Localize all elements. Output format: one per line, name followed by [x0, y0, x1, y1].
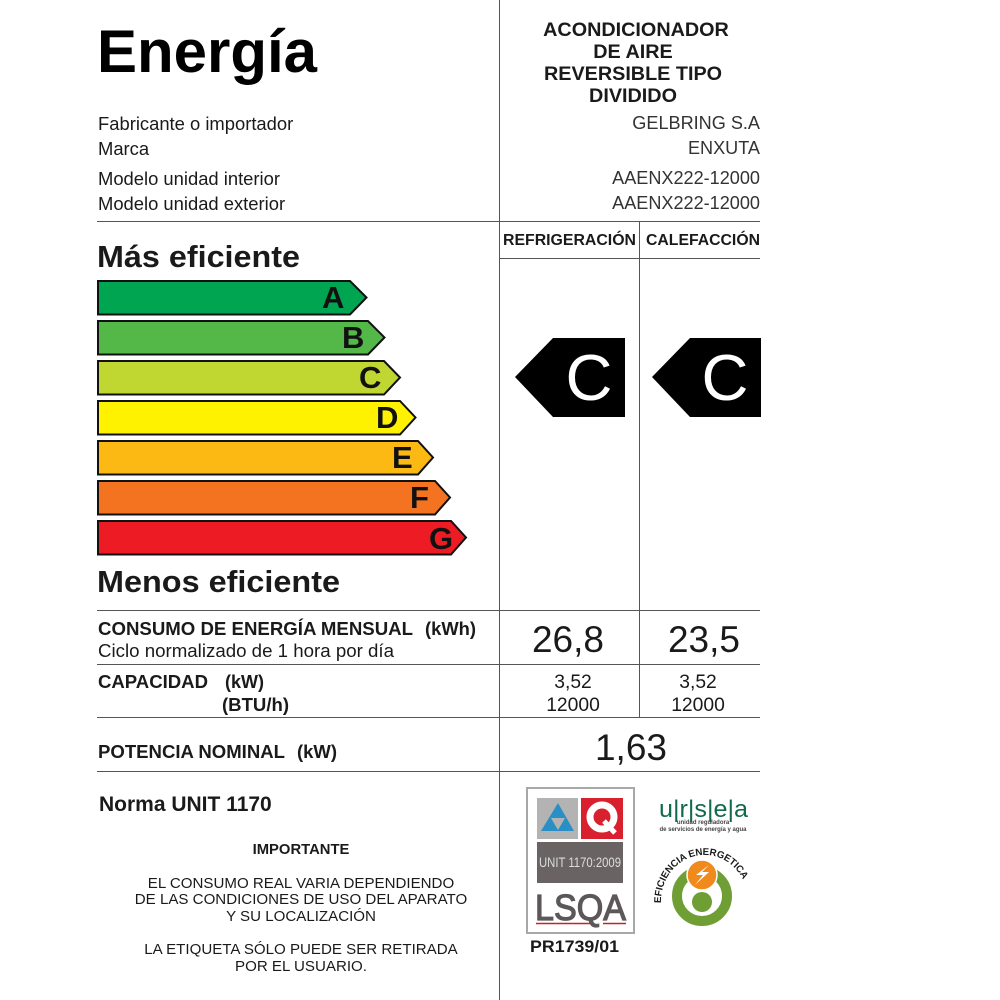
monthly energy consumption row: CONSUMO DE ENERGÍA MENSUAL — [98, 618, 413, 639]
bar C: C — [359, 360, 381, 395]
heating rating arrow — [652, 338, 761, 417]
capacity row: 3,52 — [554, 672, 592, 693]
bar A: A — [322, 280, 344, 315]
manufacturer field labels: Modelo unidad exterior — [98, 193, 285, 214]
bar F: F — [410, 480, 429, 515]
bar E — [98, 440, 433, 475]
monthly energy consumption row: Ciclo normalizado de 1 hora por día — [98, 641, 395, 661]
capacity row: (kW) — [225, 671, 264, 692]
important notice — [135, 842, 467, 975]
nominal power row — [98, 727, 667, 768]
heating rating arrow: C — [702, 341, 748, 414]
manufacturer field labels: Modelo unidad interior — [98, 168, 280, 189]
certificate number: PR1739/01 — [530, 938, 619, 956]
capacity row — [98, 671, 725, 716]
important notice: Y SU LOCALIZACIÓN — [226, 908, 376, 925]
energy efficiency logo: EFICIENCIA ENERGETICA — [654, 848, 748, 902]
cooling rating arrow — [515, 338, 625, 417]
URSEA logo: u|r|s|e|a — [659, 796, 749, 823]
bar G — [98, 521, 466, 556]
important notice: EL CONSUMO REAL VARIA DEPENDIENDO — [148, 875, 454, 892]
bar A — [98, 280, 366, 315]
heading: least efficient: Menos eficiente — [97, 564, 340, 599]
manufacturer field labels — [98, 113, 293, 214]
important notice: IMPORTANTE — [253, 842, 349, 858]
capacity row: 12000 — [671, 695, 725, 716]
bar B: B — [342, 320, 364, 355]
manufacturer field values: AAENX222-12000 — [612, 168, 760, 188]
nominal power row: (kW) — [297, 741, 337, 762]
column header: heating: CALEFACCIÓN — [646, 230, 760, 249]
URSEA logo — [659, 796, 749, 833]
bar E: E — [392, 440, 413, 475]
important notice: DE LAS CONDICIONES DE USO DEL APARATO — [135, 891, 467, 908]
manufacturer field values: GELBRING S.A — [632, 113, 761, 133]
bar B — [98, 320, 384, 355]
URSEA logo: unidad reguladora — [677, 820, 730, 826]
manufacturer field labels: Fabricante o importador — [98, 113, 293, 134]
title: Energía — [97, 18, 318, 85]
important notice: POR EL USUARIO. — [235, 958, 367, 975]
manufacturer field values — [612, 113, 761, 213]
important notice: LA ETIQUETA SÓLO PUEDE SER RETIRADA — [144, 941, 459, 958]
monthly energy consumption row — [98, 618, 740, 661]
bar D: D — [376, 400, 398, 435]
product type heading: DIVIDIDO — [589, 85, 677, 107]
manufacturer field values: ENXUTA — [688, 138, 761, 158]
monthly energy consumption row: (kWh) — [425, 618, 476, 639]
bar D — [98, 400, 416, 435]
standard name: Norma UNIT 1170 — [99, 793, 272, 816]
monthly energy consumption row: 26,8 — [532, 619, 604, 660]
nominal power row: 1,63 — [595, 727, 667, 768]
column header: cooling: REFRIGERACIÓN — [503, 230, 636, 249]
bar F — [98, 480, 450, 515]
capacity row: 12000 — [546, 695, 600, 716]
heading: most efficient: Más eficiente — [97, 239, 300, 274]
manufacturer field values: AAENX222-12000 — [612, 193, 760, 213]
manufacturer field labels: Marca — [98, 138, 150, 159]
URSEA logo: de servicios de energía y agua — [659, 827, 747, 833]
energy efficiency logo — [654, 848, 748, 926]
capacity row: 3,52 — [679, 672, 717, 693]
bar C — [98, 360, 400, 395]
product type heading — [543, 19, 729, 107]
monthly energy consumption row: 23,5 — [668, 619, 740, 660]
product type heading: REVERSIBLE TIPO — [544, 63, 722, 85]
cooling rating arrow: C — [566, 341, 612, 414]
efficiency scale bars — [98, 280, 466, 556]
bar G: G — [429, 521, 453, 556]
LSQA certification logo: UNIT 1170:2009 — [539, 854, 621, 870]
LSQA certification logo — [527, 788, 634, 933]
capacity row: (BTU/h) — [222, 694, 289, 715]
product type heading: DE AIRE — [593, 41, 673, 63]
product type heading: ACONDICIONADOR — [543, 19, 729, 41]
capacity row: CAPACIDAD — [98, 671, 208, 692]
LSQA certification logo: LSQA — [535, 887, 626, 928]
nominal power row: POTENCIA NOMINAL — [98, 741, 285, 762]
